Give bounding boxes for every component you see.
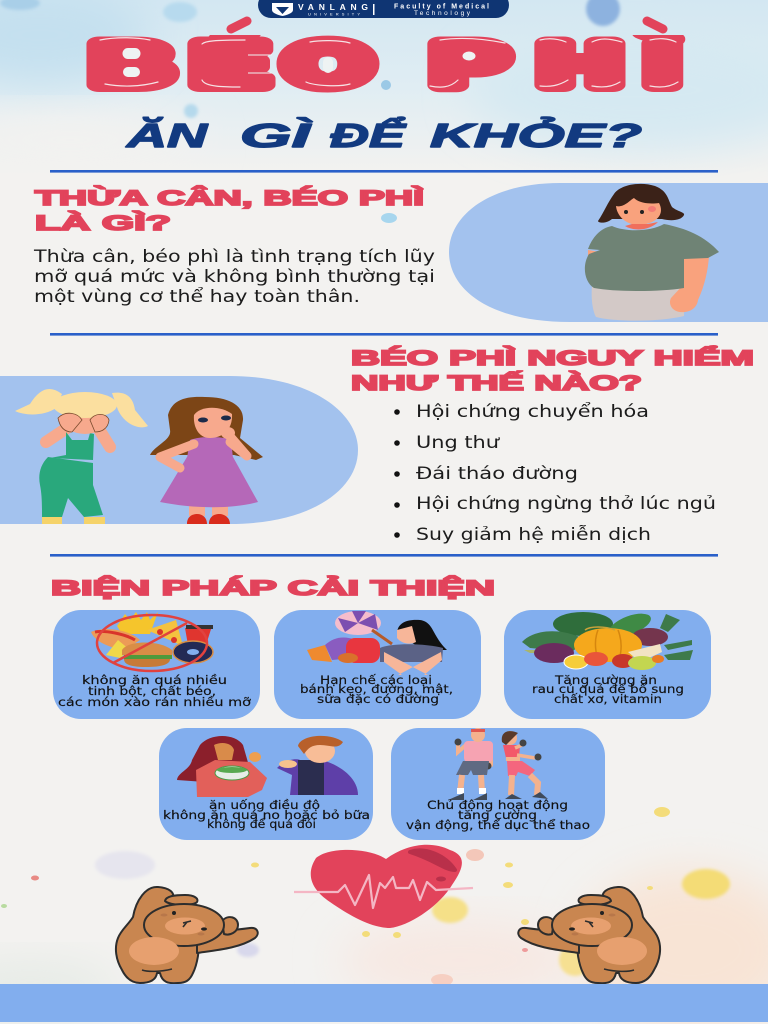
university logo badge: Technology <box>414 10 471 17</box>
heading: BÉO PHÌ NGUY HIỂM <box>351 347 754 370</box>
caption: tinh bột, chất béo, <box>88 685 216 698</box>
card: limit sweets <box>274 610 481 719</box>
heading: improvement measures: BIỆN PHÁP CẢI THIỆN <box>51 576 495 600</box>
caption: rau củ quả để bổ sung <box>532 683 684 696</box>
heading: THỪA CÂN, BÉO PHÌ <box>35 186 424 210</box>
bullet list: Hội chứng chuyển hóa <box>416 402 649 421</box>
bullet list <box>394 402 716 544</box>
caption: các món xào rán nhiều mỡ <box>58 696 251 709</box>
caption <box>163 799 370 831</box>
bullet list: Suy giảm hệ miễn dịch <box>416 525 651 544</box>
university logo badge: Faculty of Medical <box>394 4 489 10</box>
caption: ăn uống điều độ <box>209 799 320 812</box>
card: limit fat and starch <box>53 610 260 719</box>
divider 3 <box>50 554 718 557</box>
card: more vegetables <box>504 609 711 719</box>
footer band <box>0 984 768 1022</box>
paragraph: mỡ quá mức và không bình thường tại <box>34 267 435 286</box>
caption: bánh kẹo, đường, mật, <box>300 683 453 696</box>
caption: Tăng cường ăn <box>554 674 657 687</box>
caption <box>300 674 453 706</box>
caption: Hạn chế các loại <box>320 674 432 687</box>
caption: sữa đặc có đường <box>317 693 439 706</box>
subtitle: ĐỂ <box>330 117 407 154</box>
caption: Chủ động hoạt động <box>427 799 568 812</box>
caption: không ăn quá no hoặc bỏ bữa <box>163 809 370 822</box>
paragraph <box>33 247 435 306</box>
icon: heart with heartbeat <box>294 845 473 928</box>
heading: LÀ GÌ? <box>35 212 171 235</box>
heading <box>351 347 754 395</box>
illustration: left bear <box>116 887 258 983</box>
illustration: overweight woman <box>585 184 719 321</box>
subtitle <box>125 117 642 154</box>
illustration: vegetables <box>522 609 693 670</box>
paragraph: một vùng cơ thể hay toàn thân. <box>34 287 360 306</box>
caption <box>532 674 684 706</box>
bullet list: Ung thư <box>416 433 501 452</box>
card: exercise <box>391 728 605 840</box>
illustration: girl with purple dress <box>150 397 263 524</box>
illustration: crossed-out fast food <box>91 612 213 671</box>
blue panel <box>0 376 358 524</box>
heading <box>35 186 424 235</box>
subtitle: GÌ <box>240 117 314 154</box>
blue panel <box>449 183 768 322</box>
university logo badge <box>258 0 509 18</box>
bullet list: Đái tháo đường <box>416 464 578 483</box>
illustration: woman with salad and boy <box>177 736 358 797</box>
caption <box>406 799 590 832</box>
heading: NHƯ THẾ NÀO? <box>351 372 642 395</box>
university logo badge: VANLANG <box>298 2 368 12</box>
caption: chất xơ, vitamin <box>554 693 662 706</box>
divider 2 <box>50 333 718 336</box>
card: moderate eating <box>159 728 373 840</box>
caption: vận động, thể dục thể thao <box>406 819 590 832</box>
subtitle: KHỎE? <box>430 117 642 154</box>
illustration: sweets and refusing woman <box>307 611 447 675</box>
paragraph: Thừa cân, béo phì là tình trạng tích lũy <box>33 247 435 266</box>
illustration: exercising couple <box>448 728 548 800</box>
illustration: girl with overalls <box>15 389 148 524</box>
bullet list: Hội chứng ngừng thở lúc ngủ <box>416 494 716 513</box>
title: BÉO PHÌ: BÉO PHÌ <box>92 31 678 98</box>
caption: tăng cường <box>458 809 537 822</box>
caption <box>58 674 251 709</box>
caption: không để quá đói <box>207 818 316 831</box>
subtitle: ĂN <box>125 117 209 154</box>
section: what is obesity <box>33 183 768 322</box>
illustration: right bear <box>518 887 660 983</box>
caption: không ăn quá nhiều <box>82 674 227 687</box>
university logo badge: UNIVERSITY <box>308 12 360 16</box>
section: dangers <box>0 347 754 544</box>
divider 1 <box>50 170 718 173</box>
